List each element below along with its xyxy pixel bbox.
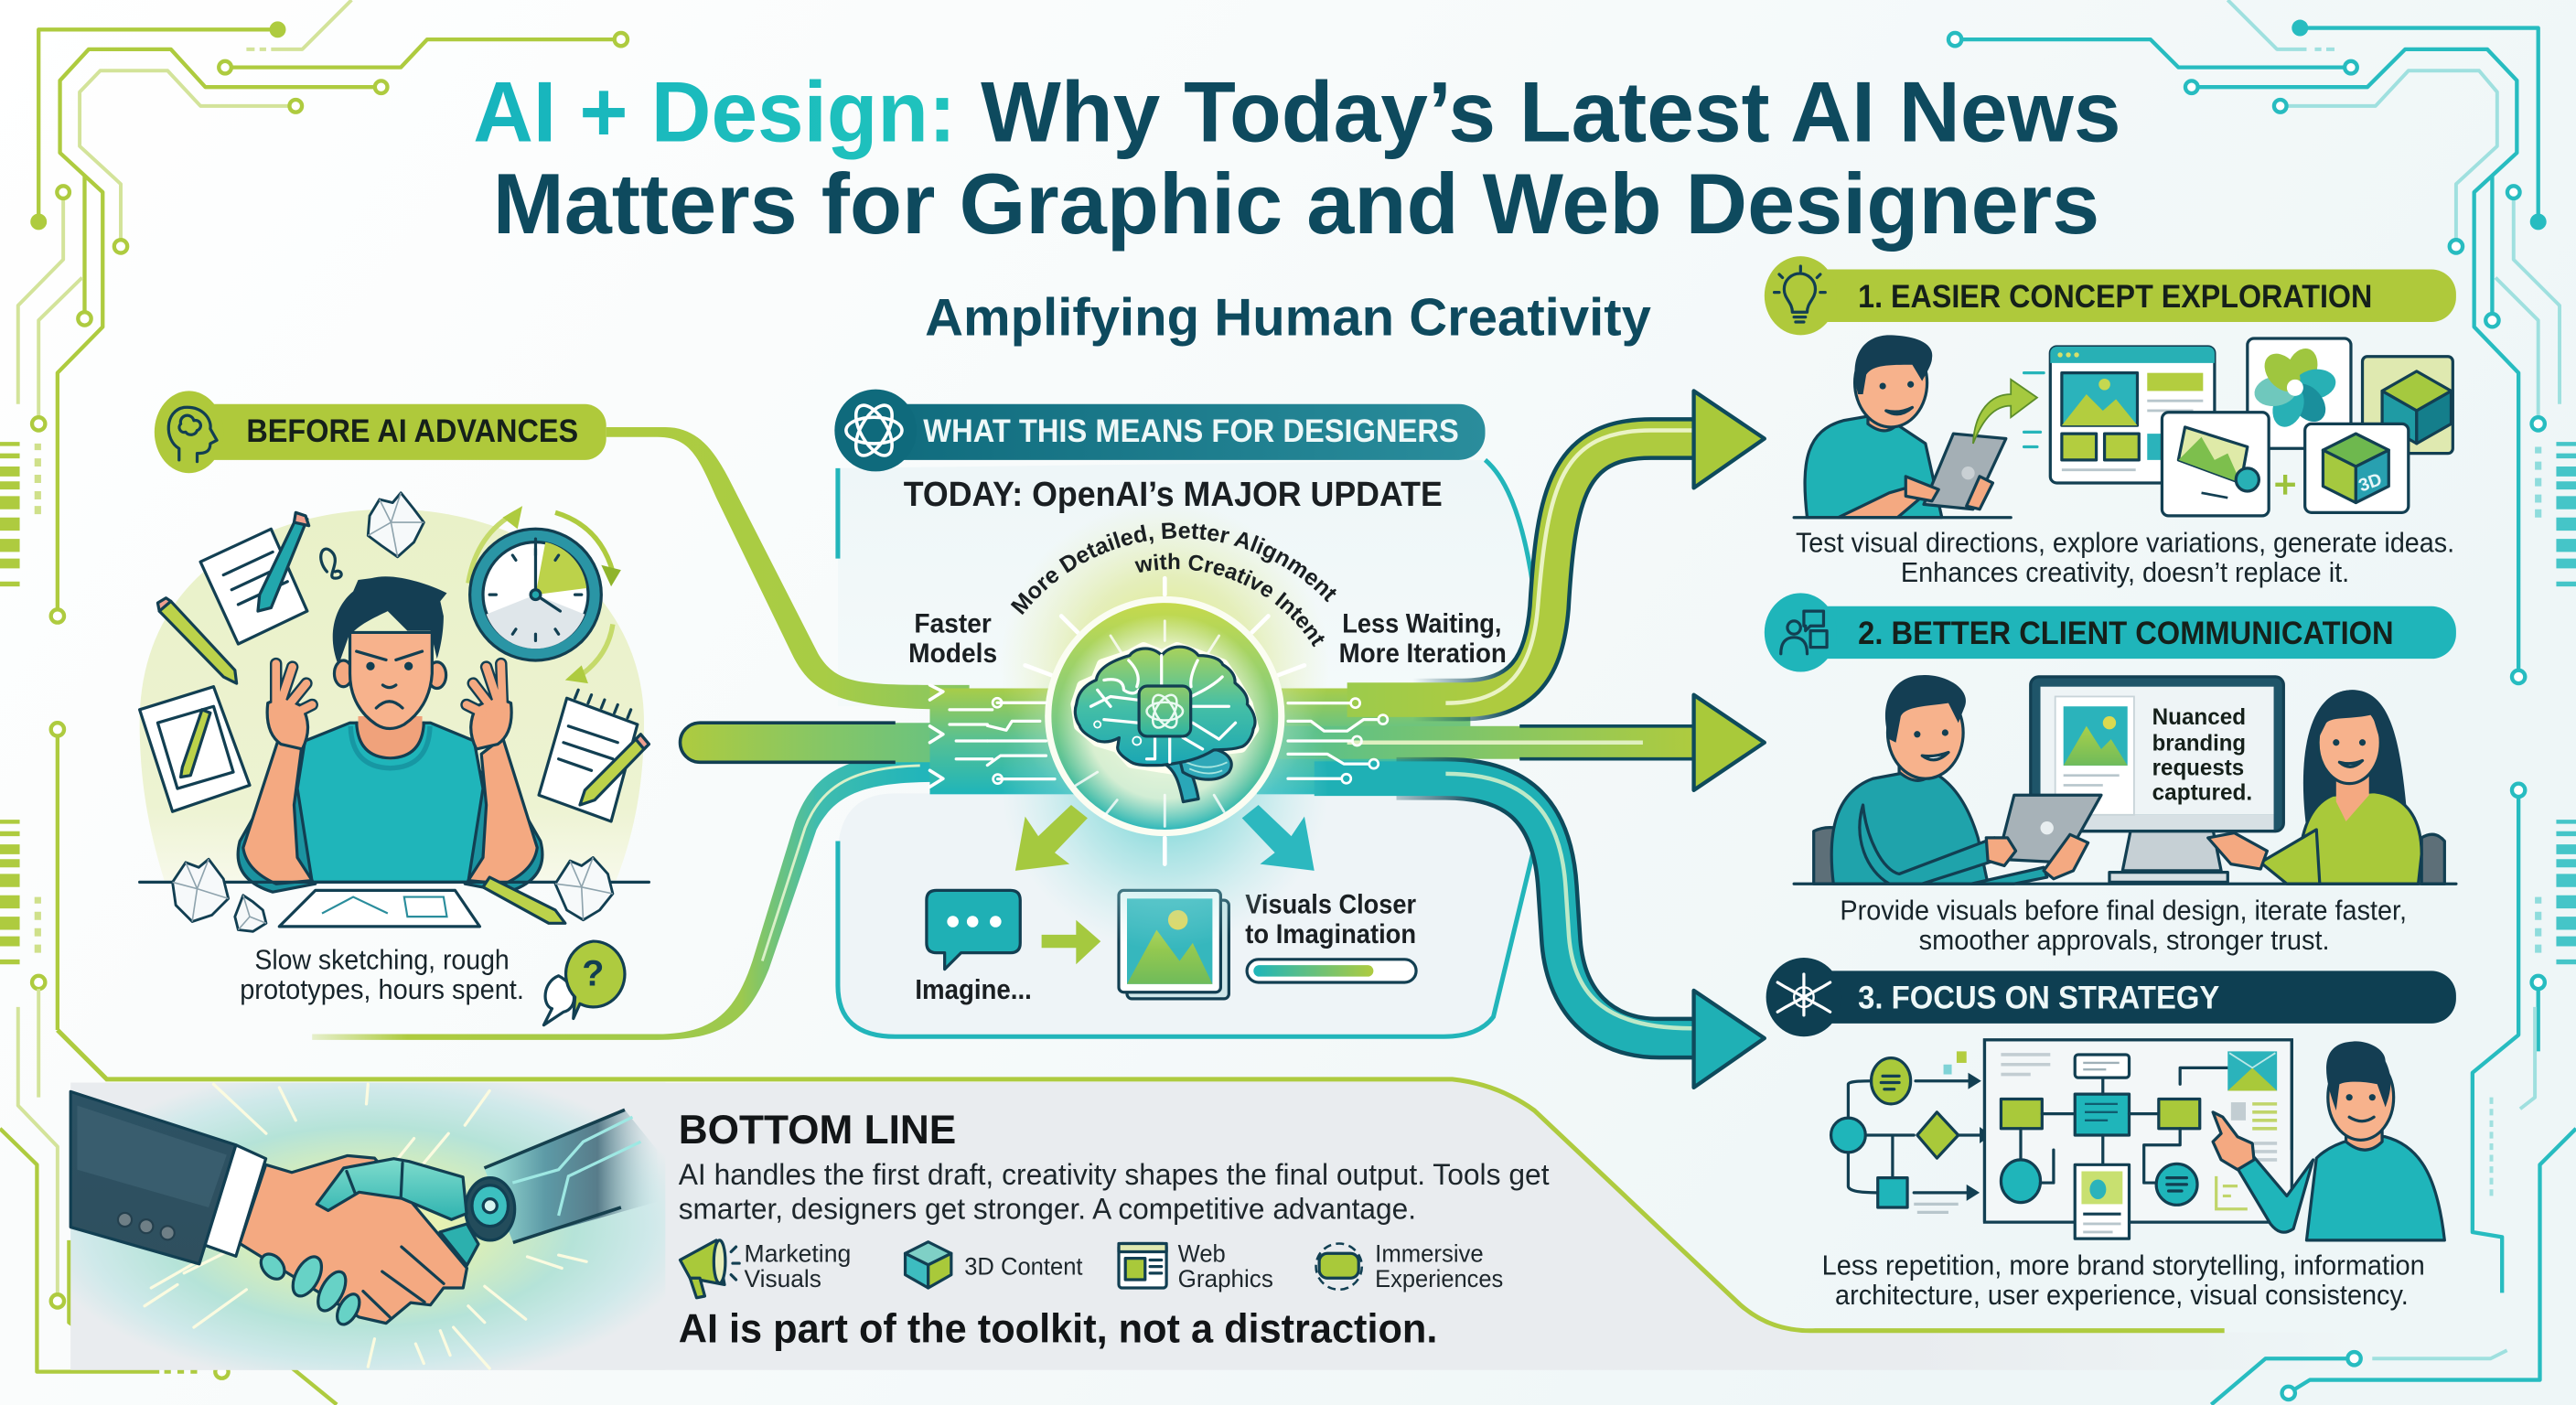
icon: megaphone [681, 1240, 739, 1298]
flowchart board [1984, 1040, 2292, 1239]
label: immersive experiences [1375, 1239, 1503, 1292]
panel: before AI advances [140, 493, 649, 1025]
body text [679, 1158, 1550, 1226]
label: less waiting: More Iteration [1339, 638, 1507, 669]
section 3: focus on strategy [1766, 958, 2456, 1311]
section 2: better client communication [1765, 593, 2456, 956]
subtitle: Amplifying Human Creativity [925, 288, 1651, 347]
illustration: handshake [70, 1083, 665, 1370]
pill: what this means [834, 390, 1486, 471]
character: client [2208, 690, 2444, 884]
sleeve: near arm [1860, 805, 2004, 884]
icon: plus [2275, 475, 2295, 495]
caption: section 2: smoother approvals, stronger trust. [1919, 925, 2330, 956]
caption: section 1: Enhances creativity, doesn’t replace it. [1901, 557, 2349, 588]
arrow: idea to concepts [1973, 380, 2037, 444]
hair [333, 576, 446, 665]
label: less waiting [1339, 608, 1507, 669]
icon: pencil [157, 598, 237, 683]
left hand [267, 664, 312, 749]
label: immersive experiences: Experiences [1375, 1265, 1503, 1292]
body text: smarter, designers get stronger. A competitive advantage. [679, 1193, 1416, 1226]
icon: paper and pen [200, 512, 309, 644]
character: designer with tablet [1794, 335, 2011, 518]
client hand [2208, 833, 2267, 869]
ears [334, 660, 352, 687]
panel fill: lower [838, 793, 1538, 1036]
caption: before AI: Slow sketching, rough [254, 945, 510, 976]
monitor [2031, 677, 2283, 882]
brain stem [1162, 762, 1198, 802]
chevrons: into hub [929, 685, 943, 787]
label: faster models: Models [908, 638, 997, 669]
desk line [140, 881, 649, 883]
panel labels: what this means [904, 475, 1507, 669]
brain halo [1077, 648, 1253, 768]
label: marketing visuals [745, 1239, 851, 1292]
hub rays [1025, 578, 1304, 864]
progress bar [1247, 960, 1416, 982]
suit sleeve [70, 1091, 236, 1264]
face [350, 632, 432, 728]
human hand [240, 1155, 467, 1324]
panel fill: upper [838, 460, 1538, 706]
band block: left of hub [929, 688, 1078, 794]
robot fingers [256, 1249, 364, 1328]
arrow: hub to visuals [1242, 805, 1315, 871]
eyes and brows [366, 662, 375, 670]
screen text: branding [2152, 731, 2246, 756]
elbow sleeves [238, 772, 542, 892]
caption: before AI [240, 945, 524, 1005]
caption: section 1: Test visual directions, explore variations, generate ideas. [1796, 527, 2454, 558]
screen text [2152, 704, 2252, 806]
handshake glow [70, 1083, 665, 1370]
left arm [243, 737, 312, 884]
hub glow: teal [1001, 621, 1329, 949]
arrow: imagine to image [1042, 920, 1100, 964]
label: imagine: Imagine... [915, 974, 1032, 1005]
pill: section 1 [1765, 256, 2456, 335]
label: immersive experiences: Immersive [1375, 1239, 1484, 1267]
label: web graphics: Web [1178, 1239, 1226, 1267]
pill label: 3. FOCUS ON STRATEGY [1858, 981, 2219, 1016]
label: marketing visuals: Marketing [745, 1239, 851, 1267]
hub inner glow [1057, 615, 1273, 831]
desk line [1794, 883, 2456, 885]
panel outline [838, 460, 1538, 1036]
label: faster models: Faster [914, 608, 992, 638]
label: web graphics: Graphics [1178, 1265, 1273, 1292]
crumpled paper: desk right [555, 857, 613, 920]
pill label: 2. BETTER CLIENT COMMUNICATION [1858, 616, 2394, 651]
character: frustrated designer [238, 576, 542, 892]
caption: section 3 [1822, 1250, 2425, 1311]
shirt [297, 723, 483, 882]
icon: image cards [1119, 890, 1229, 999]
icon: crumpled paper [368, 493, 424, 557]
card: 3D cube [2305, 424, 2409, 512]
caption: section 2: Provide visuals before final design, iterate faster, [1840, 896, 2407, 927]
closing statement: AI is part of the toolkit, not a distraction. [679, 1304, 1437, 1351]
title: Matters for Graphic and Web Designers [493, 156, 2099, 252]
label: visuals closer [1245, 890, 1417, 949]
hub inner rays [1076, 621, 1224, 826]
right hand [467, 664, 511, 749]
screen text: captured. [2152, 780, 2252, 806]
label: marketing visuals: Visuals [745, 1265, 821, 1292]
caption: section 2 [1840, 896, 2407, 956]
flowchart left [1831, 1051, 1991, 1212]
client sleeve [2260, 830, 2320, 884]
title: AI + Design: [473, 63, 956, 159]
character: designer with tablet [1814, 675, 2101, 884]
section 1: easier concept exploration [1765, 256, 2456, 588]
crumpled paper: desk left [173, 859, 229, 922]
central AI hub [950, 501, 1388, 949]
label: faster models [908, 608, 997, 669]
icon: notepad [539, 690, 649, 821]
icon: speech bubble [927, 890, 1020, 970]
label: 3D content: 3D Content [964, 1253, 1083, 1281]
arrow: to client communication [1265, 695, 1765, 790]
icon: web graphics [1119, 1244, 1166, 1288]
icon: OpenAI chip [1139, 686, 1191, 736]
illustration background blob [140, 509, 644, 881]
bottom line content [679, 1106, 1550, 1351]
arrow: central bar flow in [681, 723, 1051, 762]
icon: light bulb [1775, 266, 1825, 322]
circuit lines: left [950, 698, 1055, 784]
suit sleeve detail [77, 1106, 227, 1207]
caption: section 3: architecture, user experience, visual consistency. [1835, 1280, 2409, 1311]
frame line: bottom line panel [58, 1030, 2225, 1331]
robot hand top [317, 1159, 478, 1265]
curved text: creative intent: with Creative Intent [1134, 552, 1325, 648]
caption: section 1 [1796, 527, 2454, 588]
label: visuals closer: to Imagination [1245, 919, 1416, 949]
shirt cuff [205, 1145, 266, 1256]
circuit traces: right teal [1948, 0, 2576, 1405]
circuit traces: left lime [0, 0, 628, 1405]
robot arm [466, 1110, 659, 1242]
icon: brain [1075, 647, 1255, 802]
heading: today: TODAY: OpenAI’s MAJOR UPDATE [904, 475, 1443, 513]
arrow: lower flow in [312, 753, 937, 1040]
hub glow: lime [1001, 501, 1329, 830]
icon: sketch sheet [140, 687, 250, 811]
pill label: 1. EASIER CONCEPT EXPLORATION [1858, 279, 2372, 315]
icon: network [1777, 974, 1830, 1015]
neck [359, 716, 423, 760]
hub disc [1048, 600, 1282, 833]
pill: section 2 [1765, 593, 2456, 672]
heading: bottom line: BOTTOM LINE [679, 1106, 956, 1153]
curved text: more detailed: More Detailed, Better Alignment [1010, 523, 1336, 615]
light rays [145, 1084, 586, 1368]
character: presenter [2213, 1041, 2444, 1240]
3D label: 3D [2356, 469, 2385, 496]
card: green cube [2363, 357, 2453, 454]
icon: question bubbles: ? [582, 954, 604, 994]
arrow: to focus on strategy [1315, 774, 1765, 1088]
pill label: WHAT THIS MEANS FOR DESIGNERS [923, 413, 1459, 449]
caption: before AI: prototypes, hours spent. [240, 974, 524, 1005]
icon: 3D cube [906, 1242, 951, 1288]
cerebrum [1075, 647, 1255, 766]
arrow: hub to imagine [1015, 805, 1088, 871]
icon: OpenAI knot [846, 400, 902, 461]
brain folds and traces [1090, 656, 1236, 762]
collar [350, 726, 430, 768]
icon: question bubbles [543, 941, 625, 1025]
cerebellum [1179, 749, 1231, 779]
icon: head with brain [168, 407, 217, 462]
pill label: BEFORE AI ADVANCES [246, 413, 578, 449]
pencil on desk [483, 877, 565, 923]
screen text: requests [2152, 756, 2244, 781]
hand finger lines [363, 1247, 444, 1317]
card: spiral [2248, 338, 2351, 448]
sketch sheet on desk [279, 890, 479, 927]
label: visuals closer: Visuals Closer [1245, 890, 1417, 920]
screen text: Nuanced [2152, 704, 2246, 730]
label: web graphics [1178, 1239, 1273, 1292]
title [473, 63, 2121, 252]
sleeve: far arm [1971, 867, 2047, 884]
label: less waiting: Less Waiting, [1342, 608, 1501, 638]
icon: scribble [321, 549, 341, 578]
title: Why Today’s Latest AI News [981, 63, 2121, 159]
band block: right of hub [1257, 688, 1470, 794]
body text: AI handles the first draft, creativity shapes the final output. Tools get [679, 1158, 1550, 1191]
card: browser window [2050, 347, 2215, 483]
icon: VR headset [1316, 1244, 1362, 1290]
panel: what this means for designers [838, 460, 1538, 1036]
icon: people talking [1781, 611, 1827, 654]
panel: bottom line [58, 1030, 2366, 1370]
card: picture on screen [2055, 696, 2134, 815]
icon: clock [468, 506, 621, 683]
right arm [468, 737, 537, 884]
pill: section 3 [1766, 958, 2456, 1036]
pill: before AI advances [155, 391, 606, 473]
arrow: to concept exploration [1347, 391, 1765, 703]
caption: section 3: Less repetition, more brand storytelling, information [1822, 1250, 2425, 1282]
crumpled paper: desk small [235, 896, 266, 931]
arrow: before AI flow in [606, 427, 970, 710]
speed lines [2024, 373, 2238, 504]
circuit lines: right [1288, 699, 1388, 783]
suit buttons [118, 1213, 175, 1239]
card: monitor concept [2162, 413, 2269, 516]
